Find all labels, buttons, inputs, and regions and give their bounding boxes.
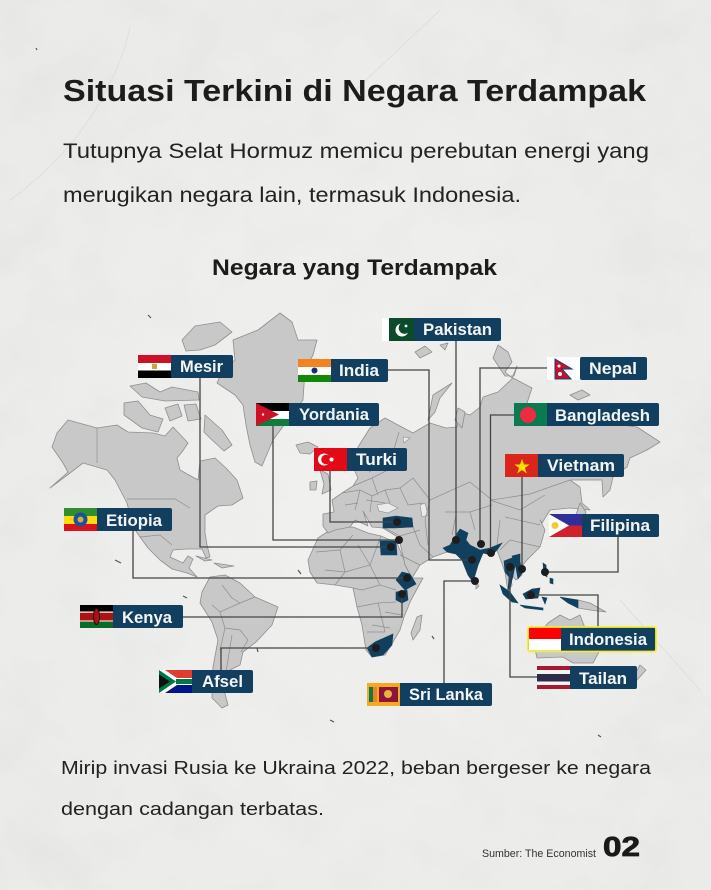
Sri Lanka [476, 582, 479, 589]
label: Pakistan [382, 318, 501, 341]
South America [200, 575, 278, 708]
Australia [533, 615, 600, 663]
label: Nepal: Nepal [589, 360, 637, 378]
label: Indonesia: Indonesia [569, 631, 648, 649]
label: Turki [314, 448, 407, 471]
label: Tailan: Tailan [579, 670, 627, 688]
label: Turki: Turki [356, 451, 397, 469]
label: Sri Lanka [367, 683, 492, 706]
source: Sumber: The Economist [482, 848, 596, 860]
inland and enclosed seas [367, 437, 428, 517]
Greenland [217, 313, 317, 466]
intro text: merugikan negara lain, termasuk Indonesia. [63, 183, 521, 207]
Madagascar [411, 615, 422, 640]
label: Afsel: Afsel [202, 673, 243, 691]
Papua New Guinea [578, 600, 606, 612]
label: Indonesia [528, 627, 656, 652]
label: Mesir [138, 355, 233, 378]
closing text [61, 757, 652, 819]
connector lines [133, 341, 618, 683]
highlighted: Egypt [380, 541, 397, 555]
Eurasia [323, 378, 660, 592]
closing text: Mirip invasi Rusia ke Ukraina 2022, beban bergeser ke negara [61, 757, 652, 778]
label: Yordania: Yordania [299, 406, 370, 424]
label: Bangladesh [514, 403, 659, 426]
intro text [63, 139, 649, 207]
title: Situasi Terkini di Negara Terdampak [63, 73, 647, 108]
label: Nepal [547, 357, 647, 380]
label: Kenya [80, 605, 183, 628]
world map [50, 313, 660, 708]
label: Kenya: Kenya [122, 609, 173, 627]
label: Sri Lanka: Sri Lanka [409, 686, 484, 704]
label: Afsel [159, 670, 253, 693]
label: India [298, 359, 388, 382]
highlighted: South Africa [367, 634, 393, 657]
intro text: Tutupnya Selat Hormuz memicu perebutan energi yang [63, 139, 649, 163]
label: Etiopia: Etiopia [106, 512, 163, 530]
highlighted: Indonesia [500, 585, 578, 610]
label: Vietnam [505, 454, 624, 477]
New Zealand [634, 665, 646, 680]
highlighted: Thailand and Vietnam [504, 554, 523, 590]
Africa [308, 527, 423, 657]
label: Etiopia [64, 508, 172, 531]
highlighted: Ethiopia [396, 572, 416, 590]
page number: 02 [603, 831, 640, 862]
label: Yordania [256, 403, 379, 426]
highlighted: Turkey [383, 516, 413, 528]
label: India: India [339, 362, 380, 380]
highlighted: Philippines [543, 563, 553, 584]
Caribbean [196, 556, 234, 568]
map heading: Negara yang Terdampak [212, 255, 498, 280]
label: Filipina: Filipina [590, 517, 651, 535]
highlighted: Pakistan, India and Bangladesh [443, 529, 502, 582]
British Isles [310, 470, 331, 494]
label: Tailan [537, 666, 637, 689]
label: Filipina [549, 514, 659, 537]
Canadian arctic islands [124, 322, 232, 451]
label: Pakistan: Pakistan [423, 321, 492, 339]
label: Bangladesh: Bangladesh [555, 407, 650, 425]
closing text: dengan cadangan terbatas. [61, 798, 324, 819]
location dots [372, 518, 549, 652]
North America [50, 420, 243, 577]
label: Vietnam: Vietnam [547, 457, 615, 475]
Novaya Zemlya and arctic islands [415, 343, 590, 428]
label: Mesir: Mesir [180, 358, 224, 376]
Iceland [296, 442, 318, 454]
highlighted: Kenya [396, 590, 408, 603]
Japan [572, 503, 586, 528]
